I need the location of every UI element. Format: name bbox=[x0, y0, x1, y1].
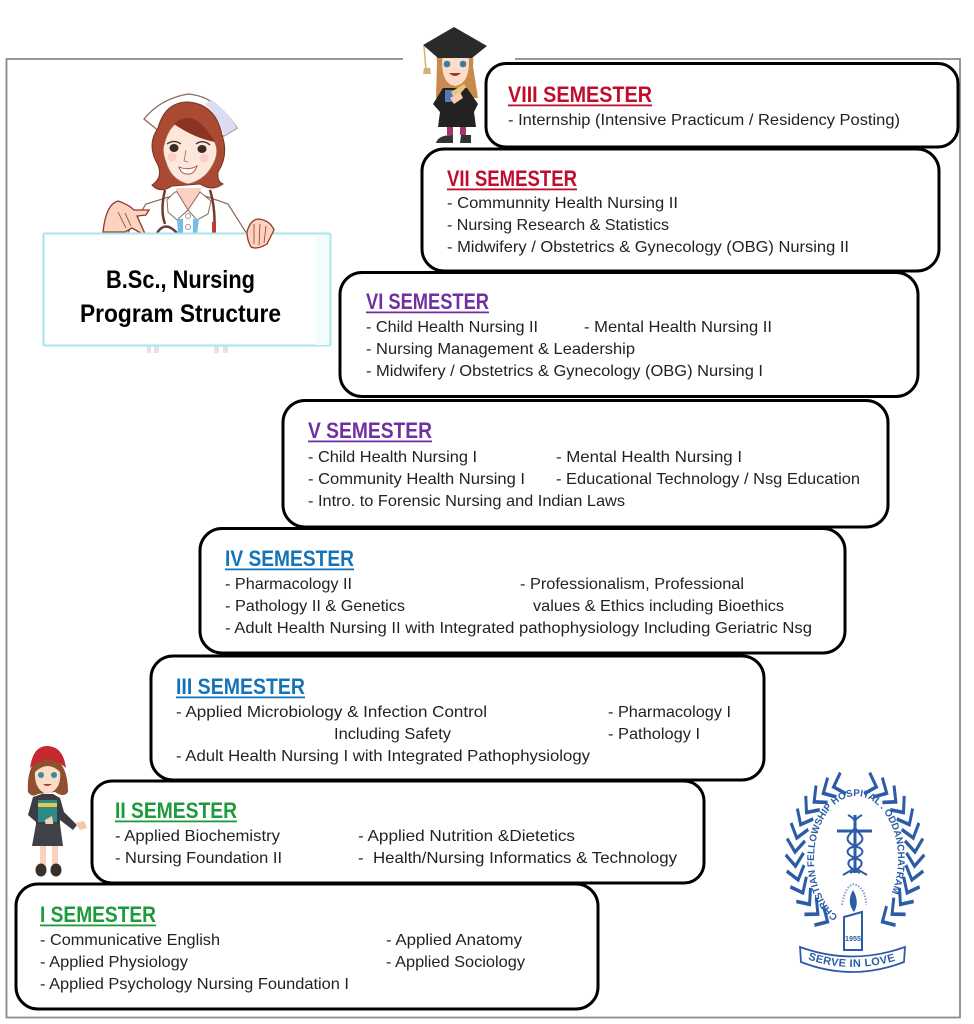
title: Program Structure bbox=[80, 300, 281, 328]
heading: II semester: II SEMESTER bbox=[115, 798, 237, 823]
subjects: VII semester: - Midwifery / Obstetrics & Gynecology (OBG) Nursing II bbox=[447, 239, 849, 256]
subjects: V semester: - Child Health Nursing I bbox=[308, 449, 477, 466]
logo ring text: CHRISTIAN FELLOWSHIP HOSPITAL . ODDANCHATRAM bbox=[807, 789, 905, 920]
title bbox=[80, 266, 281, 328]
candle bbox=[842, 884, 866, 950]
illustration: student girl with books bbox=[28, 746, 87, 876]
subjects: VI semester: - Child Health Nursing II bbox=[366, 319, 538, 336]
subjects: III semester: - Pathology I bbox=[608, 726, 700, 743]
subjects: IV semester: - Adult Health Nursing II with Integrated pathophysiology Including Geriatric Nsg bbox=[225, 620, 812, 637]
subjects: V semester: - Community Health Nursing I bbox=[308, 471, 525, 488]
subjects: III semester: Including Safety bbox=[334, 726, 451, 743]
illustration: nurse holding sign bbox=[103, 94, 247, 353]
subjects: II semester bbox=[115, 828, 677, 867]
subjects: IV semester bbox=[225, 576, 812, 637]
panel: VI semester bbox=[340, 272, 918, 396]
panel: VIII semester bbox=[486, 64, 958, 147]
subjects: VIII semester: - Internship (Intensive Practicum / Residency Posting) bbox=[508, 112, 900, 129]
subjects: III semester: - Applied Microbiology & Infection Control bbox=[176, 704, 487, 721]
subjects: I semester: - Communicative English bbox=[40, 932, 220, 949]
heading: VIII semester: VIII SEMESTER bbox=[508, 82, 652, 107]
heading: VII semester: VII SEMESTER bbox=[447, 166, 577, 191]
subjects: III semester bbox=[176, 704, 731, 765]
subjects: VI semester: - Midwifery / Obstetrics & Gynecology (OBG) Nursing I bbox=[366, 363, 763, 380]
panel: V semester bbox=[283, 400, 888, 527]
candle: 1955 bbox=[845, 934, 861, 943]
subjects: IV semester: values & Ethics including Bioethics bbox=[533, 598, 784, 615]
subjects: II semester: - Applied Biochemistry bbox=[115, 828, 280, 845]
subjects: III semester: - Pharmacology I bbox=[608, 704, 731, 721]
panel: IV semester bbox=[200, 528, 845, 653]
subjects: II semester: - Applied Nutrition &Dietetics bbox=[358, 828, 575, 845]
wreath bbox=[786, 773, 924, 931]
subjects: V semester: - Mental Health Nursing I bbox=[556, 449, 742, 466]
caduceus cross bbox=[837, 815, 872, 875]
subjects: VII semester bbox=[447, 195, 849, 256]
subjects: VI semester bbox=[366, 319, 772, 380]
subjects: VI semester: - Nursing Management & Leadership bbox=[366, 341, 635, 358]
subjects: III semester: - Adult Health Nursing I with Integrated Pathophysiology bbox=[176, 748, 590, 765]
motto banner: SERVE IN LOVE bbox=[808, 952, 895, 967]
subjects: I semester: - Applied Sociology bbox=[386, 954, 525, 971]
heading: III semester: III SEMESTER bbox=[176, 674, 305, 699]
subjects: VII semester: - Communnity Health Nursing II bbox=[447, 195, 678, 212]
heading: V semester: V SEMESTER bbox=[308, 418, 432, 443]
subjects: VI semester: - Mental Health Nursing II bbox=[584, 319, 772, 336]
subjects: VII semester: - Nursing Research & Statistics bbox=[447, 217, 669, 234]
title: B.Sc., Nursing bbox=[106, 266, 255, 294]
icon: nurse right hand over sign bbox=[247, 219, 274, 248]
subjects: IV semester: - Professionalism, Professional bbox=[520, 576, 744, 593]
subjects: II semester: - Health/Nursing Informatics & Technology bbox=[358, 850, 677, 867]
panel: I semester bbox=[16, 884, 598, 1009]
heading: IV semester: IV SEMESTER bbox=[225, 546, 354, 571]
sign board bbox=[44, 234, 330, 346]
panel: III semester bbox=[151, 656, 764, 780]
subjects: II semester: - Nursing Foundation II bbox=[115, 850, 282, 867]
subjects: IV semester: - Pathology II & Genetics bbox=[225, 598, 405, 615]
logo: Christian Fellowship Hospital emblem bbox=[784, 772, 926, 973]
panel: VII semester bbox=[422, 149, 939, 271]
subjects: I semester: - Applied Physiology bbox=[40, 954, 188, 971]
subjects: V semester bbox=[308, 449, 860, 510]
heading: VI semester: VI SEMESTER bbox=[366, 289, 489, 314]
motto banner bbox=[799, 946, 906, 973]
subjects: V semester: - Intro. to Forensic Nursing and Indian Laws bbox=[308, 493, 625, 510]
subjects: I semester: - Applied Anatomy bbox=[386, 932, 522, 949]
illustration: graduate bbox=[423, 27, 487, 143]
panel: II semester bbox=[92, 781, 704, 883]
subjects: I semester bbox=[40, 932, 525, 993]
subjects: I semester: - Applied Psychology Nursing Foundation I bbox=[40, 976, 349, 993]
subjects: V semester: - Educational Technology / Nsg Education bbox=[556, 471, 860, 488]
subjects: IV semester: - Pharmacology II bbox=[225, 576, 352, 593]
heading: I semester: I SEMESTER bbox=[40, 902, 156, 927]
